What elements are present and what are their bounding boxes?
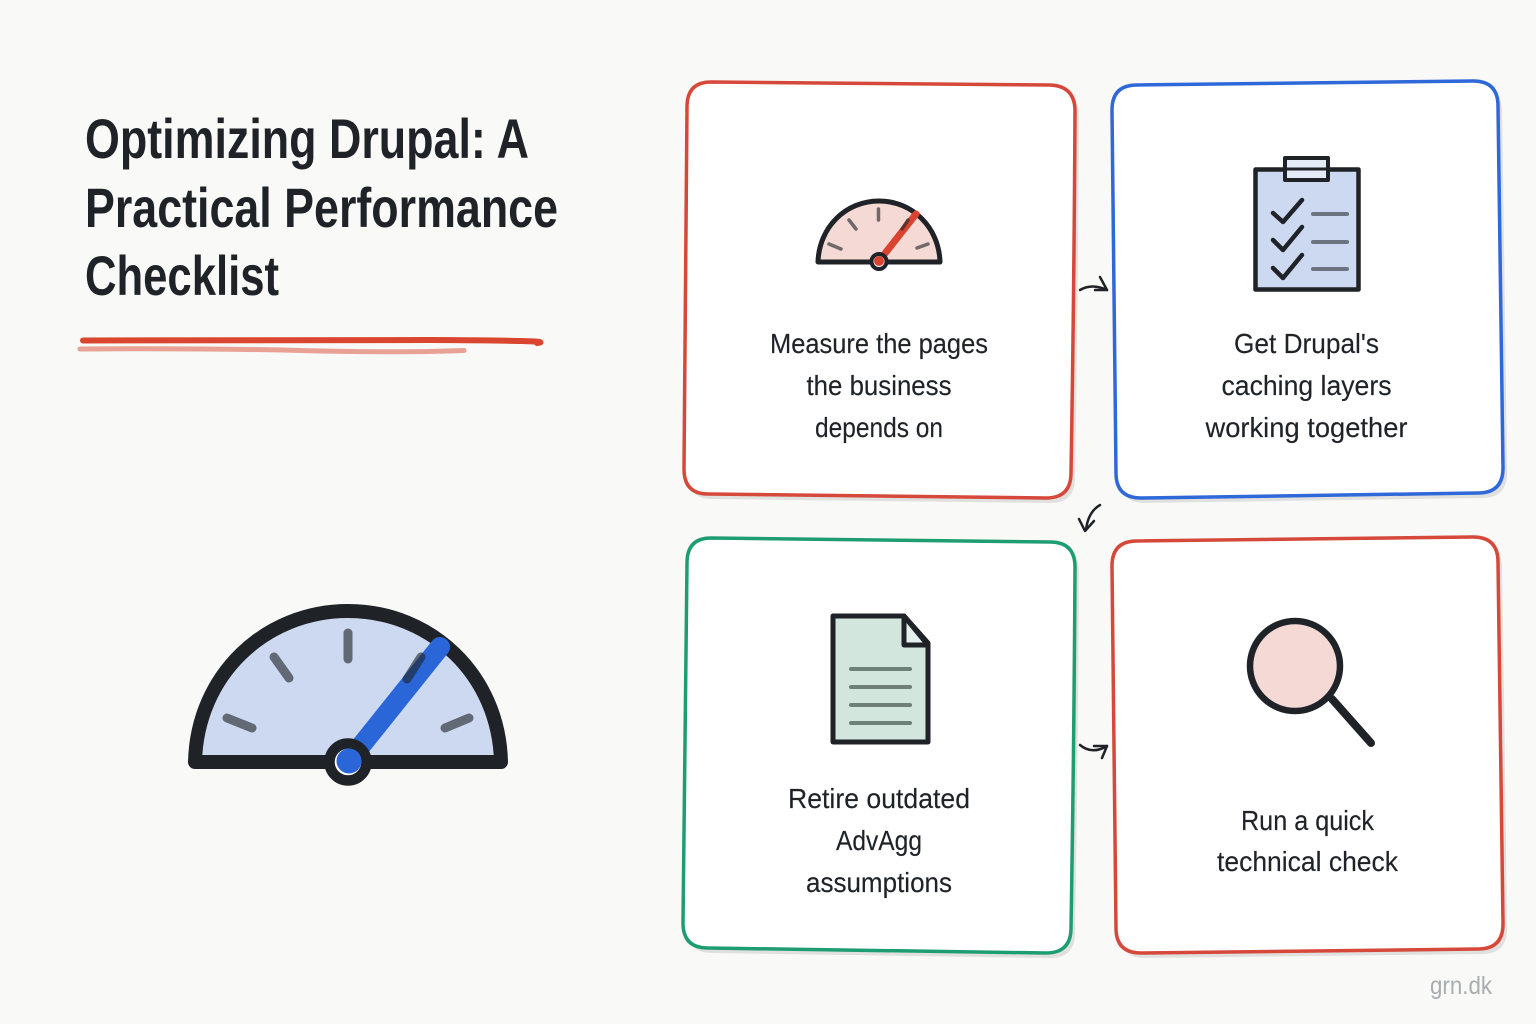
card text: depends on [815,412,943,443]
icon: document [833,616,928,742]
title: Checklist [85,244,279,307]
arrow: retire to technical check [1080,745,1107,758]
card text: caching layers [1222,370,1392,401]
card text: technical check [1217,846,1399,877]
card text: Run a quick [1241,805,1375,836]
panel: technical check [1112,537,1507,958]
watermark: grn.dk [1430,972,1492,1000]
arrow: caching to retire [1079,505,1100,531]
card text: Retire outdated [788,783,970,814]
title: Practical Performance [85,176,558,239]
card text: assumptions [806,867,952,898]
title underline [80,340,540,352]
card text [770,328,988,443]
title: Optimizing Drupal: A [85,107,529,170]
arrow: measure to caching [1080,277,1107,290]
card text [1217,805,1399,877]
card text [788,783,970,898]
card text: Measure the pages [770,328,988,359]
icon: clipboard checklist [1256,158,1358,290]
title [85,107,558,307]
icon: magnifying glass [1250,621,1371,743]
card text: AdvAgg [836,825,922,856]
card text: Get Drupal's [1234,328,1379,359]
card text: the business [806,370,952,401]
card text [1205,328,1408,443]
panel: measure the pages [684,82,1079,503]
card text: working together [1205,412,1408,443]
icon: large speedometer gauge [195,611,501,780]
panel: caching layers [1112,81,1507,503]
panel: retire AdvAgg [683,538,1079,958]
icon: small speedometer gauge [818,201,940,269]
